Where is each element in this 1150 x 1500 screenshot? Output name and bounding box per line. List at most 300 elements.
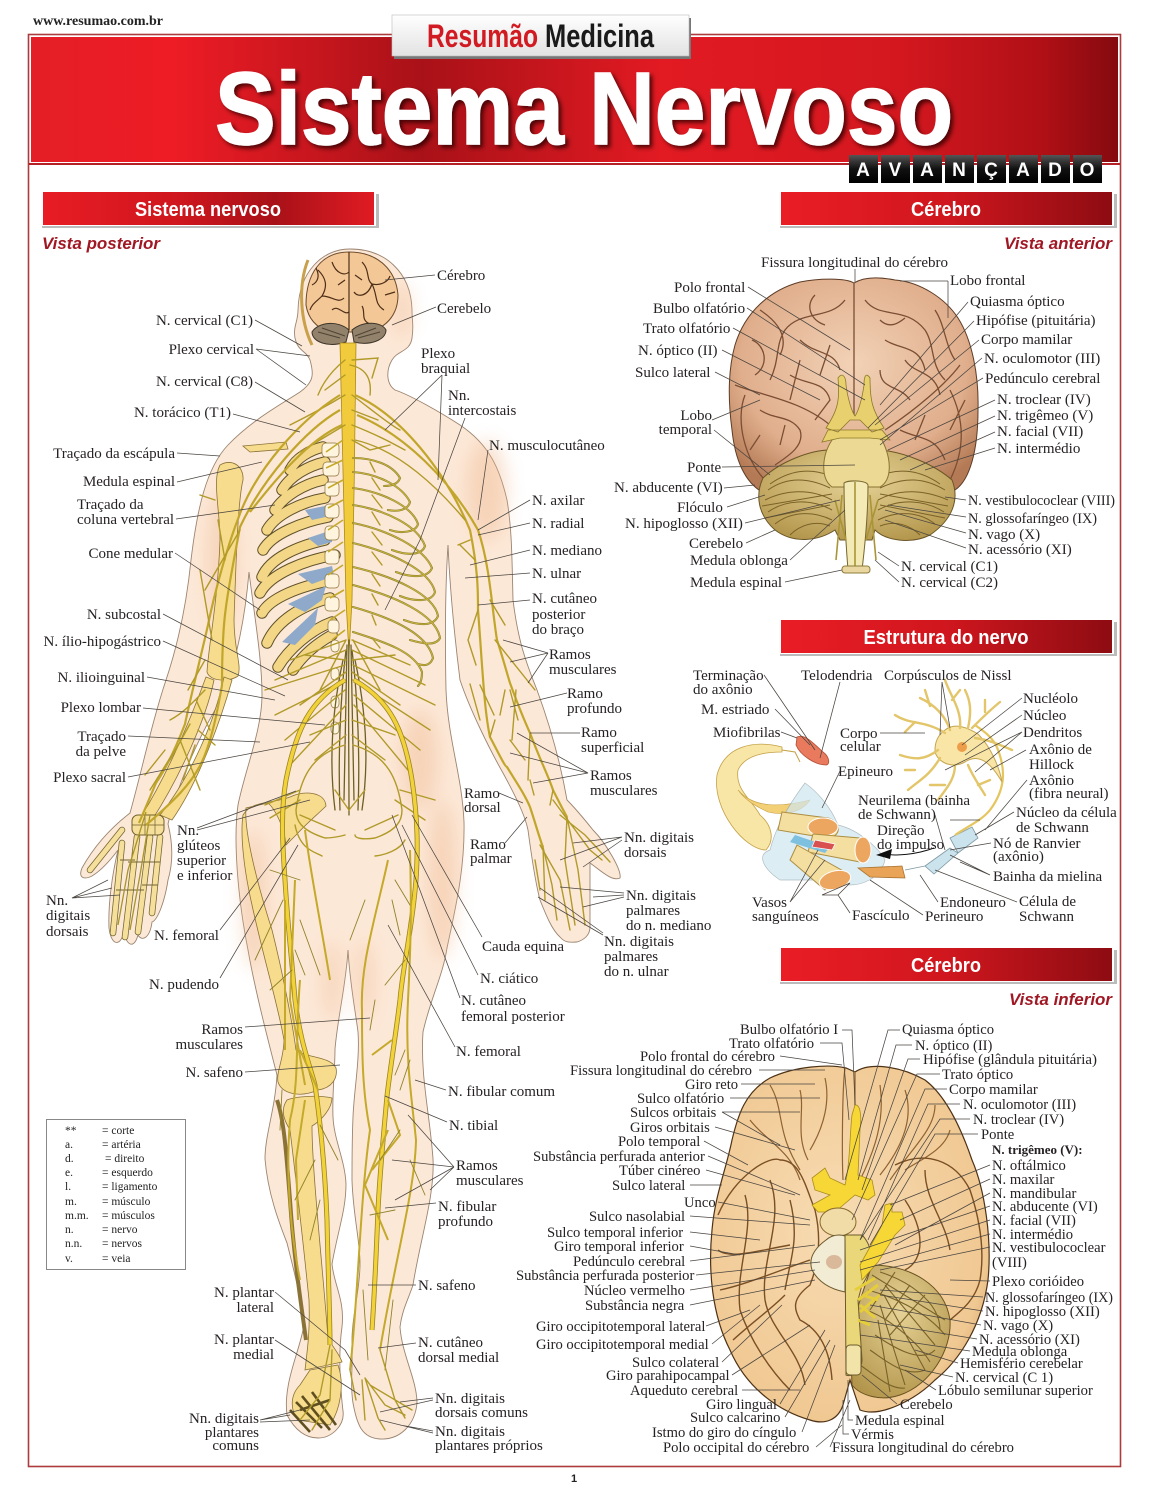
labels: Traçado bbox=[77, 729, 126, 745]
labels: dorsais bbox=[46, 924, 89, 940]
labels: de Schwann bbox=[1016, 820, 1089, 836]
pons and optic nerves bbox=[824, 432, 889, 487]
labels: N. vestibulococlear bbox=[992, 1240, 1106, 1256]
labels: superior bbox=[177, 853, 226, 869]
labels: palmares bbox=[626, 903, 680, 919]
dendrites bbox=[895, 680, 1012, 800]
labels: Sulco lateral bbox=[635, 365, 710, 381]
labels: N. troclear (IV) bbox=[973, 1112, 1064, 1128]
pelvis and femur bbox=[242, 793, 342, 1425]
labels: N. glossofaríngeo (IX) bbox=[985, 1290, 1113, 1306]
legend box: = corte bbox=[102, 1125, 134, 1137]
labels: Substância negra bbox=[585, 1298, 685, 1314]
labels: Nn. digitais bbox=[604, 934, 674, 950]
labels: N. troclear (IV) bbox=[997, 392, 1091, 408]
labels: Terminação bbox=[693, 668, 764, 684]
pons and medulla section bbox=[845, 1235, 871, 1376]
labels: Istmo do giro do cíngulo bbox=[652, 1425, 796, 1441]
labels: N. fibular bbox=[438, 1199, 496, 1215]
cerebellum bbox=[759, 450, 955, 540]
labels: N. abducente (VI) bbox=[992, 1199, 1098, 1215]
labels: Cauda equina bbox=[482, 939, 564, 955]
panel: body nervous system figure bbox=[44, 249, 711, 1454]
arm nerve left bbox=[139, 395, 342, 825]
labels: do n. mediano bbox=[626, 918, 711, 934]
labels: Ramos bbox=[201, 1022, 243, 1038]
section heading: cerebro inferior bbox=[779, 946, 1117, 984]
avancado badge bbox=[849, 155, 1102, 183]
labels: N. tibial bbox=[449, 1118, 498, 1134]
labels: Axônio de bbox=[1029, 742, 1092, 758]
left skeleton: scapula and humerus bbox=[142, 442, 288, 820]
legend box bbox=[46, 1120, 186, 1270]
labels: Corpo mamilar bbox=[981, 332, 1072, 348]
labels: Bulbo olfatório I bbox=[740, 1022, 838, 1038]
labels: Corpo mamilar bbox=[949, 1082, 1038, 1098]
legend box: e. bbox=[65, 1167, 73, 1179]
labels: Nn. bbox=[46, 893, 68, 909]
labels: Perineuro bbox=[925, 909, 983, 925]
labels: N. óptico (II) bbox=[638, 343, 718, 359]
outgoing nerve bundle bbox=[858, 866, 905, 878]
labels: Hillock bbox=[1029, 757, 1074, 773]
labels: Nn. bbox=[448, 388, 470, 404]
labels: intercostais bbox=[448, 403, 516, 419]
panel: nerve structure diagram bbox=[693, 668, 1117, 925]
labels: glúteos bbox=[177, 838, 220, 854]
legend box: = nervos bbox=[102, 1238, 143, 1250]
labels: profundo bbox=[567, 701, 622, 717]
myelinated axon bbox=[905, 827, 978, 874]
labels: Ramos bbox=[590, 768, 632, 784]
legend box: l. bbox=[65, 1181, 71, 1193]
labels: Nó de Ranvier bbox=[993, 836, 1080, 852]
labels: dorsais comuns bbox=[435, 1405, 528, 1421]
labels: N. mediano bbox=[532, 543, 602, 559]
labels bbox=[516, 1022, 1113, 1456]
labels: profundo bbox=[438, 1214, 493, 1230]
section heading: estrutura do nervo: Estrutura do nervo bbox=[864, 627, 1028, 649]
labels: N. plantar bbox=[214, 1285, 274, 1301]
labels: N. maxilar bbox=[992, 1172, 1055, 1188]
labels: Cerebelo bbox=[437, 301, 491, 317]
gyri bbox=[750, 1068, 950, 1180]
labels: N. hipoglosso (XII) bbox=[985, 1304, 1100, 1320]
labels: Célula de bbox=[1019, 894, 1076, 910]
labels: Trato olfatório bbox=[729, 1036, 814, 1052]
labels: Plexo sacral bbox=[53, 770, 126, 786]
labels: Cerebelo bbox=[689, 536, 743, 552]
labels: Lobo frontal bbox=[950, 273, 1025, 289]
cut brainstem bbox=[811, 1235, 845, 1292]
left spinal branches bbox=[326, 440, 345, 640]
labels: N. trigêmeo (V): bbox=[992, 1142, 1083, 1157]
labels: braquial bbox=[421, 361, 470, 377]
labels: do axônio bbox=[693, 682, 753, 698]
labels: N. intermédio bbox=[992, 1227, 1073, 1243]
labels: Plexo lombar bbox=[61, 700, 141, 716]
labels: Aqueduto cerebral bbox=[630, 1383, 738, 1399]
labels: do braço bbox=[532, 622, 584, 638]
labels: N. cervical (C 1) bbox=[955, 1370, 1053, 1386]
labels: N. cervical (C8) bbox=[156, 374, 253, 390]
labels: Substância perfurada anterior bbox=[533, 1149, 705, 1165]
labels: Quiasma óptico bbox=[970, 294, 1065, 310]
labels: Plexo cervical bbox=[169, 342, 254, 358]
labels: Medula espinal bbox=[855, 1413, 945, 1429]
legend box: ** bbox=[65, 1125, 77, 1137]
labels: Nn. digitais bbox=[626, 888, 696, 904]
left foot nerves bbox=[300, 1345, 332, 1430]
labels: Polo frontal bbox=[674, 280, 745, 296]
labels: Polo occipital do cérebro bbox=[663, 1440, 809, 1456]
labels: Nn. digitais bbox=[435, 1391, 505, 1407]
cervical and brachial branches bbox=[290, 358, 405, 452]
labels: N. plantar bbox=[214, 1332, 274, 1348]
legend box: = esquerdo bbox=[102, 1167, 153, 1179]
labels: Cone medular bbox=[88, 546, 173, 562]
legend box: = ligamento bbox=[102, 1181, 158, 1193]
avancado badge: N bbox=[952, 160, 966, 181]
labels: N. vestibulococlear (VIII) bbox=[968, 493, 1115, 509]
labels: Ramos bbox=[456, 1158, 498, 1174]
section heading: cerebro anterior bbox=[779, 190, 1117, 228]
labels: N. vago (X) bbox=[968, 527, 1040, 543]
labels: Schwann bbox=[1019, 909, 1074, 925]
labels: Sulco olfatório bbox=[637, 1091, 724, 1107]
labels: N. safeno bbox=[186, 1065, 243, 1081]
labels: N. cutâneo bbox=[532, 591, 597, 607]
section heading: estrutura do nervo bbox=[779, 618, 1117, 656]
cerebellum hemisphere bbox=[850, 1265, 950, 1398]
gyri bbox=[735, 283, 965, 480]
labels: N. acessório (XI) bbox=[968, 542, 1072, 558]
labels: Medula oblonga bbox=[690, 553, 788, 569]
avancado badge: A bbox=[1016, 160, 1030, 181]
subheading: vista inferior: Vista inferior bbox=[1009, 990, 1113, 1009]
cerebrum bbox=[729, 278, 978, 493]
labels: Traçado da bbox=[77, 497, 144, 513]
labels: posterior bbox=[532, 607, 585, 623]
leader lines bbox=[712, 269, 995, 582]
labels: Ramo bbox=[470, 837, 506, 853]
labels: N. facial (VII) bbox=[997, 424, 1083, 440]
labels: Ramos bbox=[549, 647, 591, 663]
labels: N. ilioinguinal bbox=[58, 670, 145, 686]
right foot nerves bbox=[350, 1350, 412, 1430]
labels: dorsais bbox=[624, 845, 667, 861]
labels: Medula oblonga bbox=[972, 1344, 1068, 1360]
cauda equina and lumbar branches bbox=[332, 640, 366, 815]
labels: Fissura longitudinal do cérebro bbox=[832, 1440, 1014, 1456]
skull and brain bbox=[302, 252, 398, 345]
labels: dorsal bbox=[464, 800, 501, 816]
legend box: = veia bbox=[102, 1253, 131, 1265]
labels: superficial bbox=[581, 740, 644, 756]
left ribs bbox=[260, 447, 335, 670]
labels: Pedúnculo cerebral bbox=[985, 371, 1100, 387]
labels: N. subcostal bbox=[87, 607, 161, 623]
labels: Axônio bbox=[1029, 773, 1074, 789]
labels: N. ulnar bbox=[532, 566, 581, 582]
legend box: v. bbox=[65, 1253, 73, 1265]
labels: Giro occipitotemporal lateral bbox=[536, 1319, 705, 1335]
labels: Medula espinal bbox=[83, 474, 175, 490]
labels: N. ciático bbox=[480, 971, 538, 987]
header banner bbox=[29, 37, 1120, 166]
labels: Cerebelo bbox=[900, 1397, 953, 1413]
labels: Unco bbox=[684, 1195, 716, 1211]
labels: N. cervical (C1) bbox=[901, 559, 998, 575]
brand tag: Resumão bbox=[427, 18, 538, 54]
labels: lateral bbox=[237, 1300, 274, 1316]
labels: plantares próprios bbox=[435, 1438, 543, 1454]
avancado badge: A bbox=[856, 160, 870, 181]
labels: plantares bbox=[205, 1425, 259, 1441]
spinal cord bbox=[340, 343, 356, 654]
labels: N. oculomotor (III) bbox=[984, 351, 1100, 367]
section heading: cerebro anterior: Cérebro bbox=[911, 199, 981, 221]
labels: Ramo bbox=[581, 725, 617, 741]
epineurium bbox=[763, 783, 885, 885]
labels: Hipófise (pituitária) bbox=[976, 313, 1096, 329]
trigeminal nerve bbox=[860, 1203, 905, 1280]
left foot bones bbox=[290, 1392, 336, 1432]
labels: Endoneuro bbox=[940, 895, 1006, 911]
avancado badge: V bbox=[889, 160, 902, 181]
left hand bones bbox=[90, 812, 164, 937]
title: Sistema Nervoso bbox=[215, 51, 953, 166]
labels: Nn. digitais bbox=[624, 830, 694, 846]
labels: Hemisfério cerebelar bbox=[960, 1356, 1083, 1372]
labels bbox=[693, 668, 1117, 925]
labels: N. femoral bbox=[456, 1044, 521, 1060]
labels: Sulco calcarino bbox=[690, 1410, 780, 1426]
labels: musculares bbox=[590, 783, 658, 799]
labels: N. glossofaríngeo (IX) bbox=[968, 511, 1097, 527]
labels: musculares bbox=[456, 1173, 524, 1189]
labels: Fissura longitudinal do cérebro bbox=[570, 1063, 752, 1079]
labels: N. cervical (C2) bbox=[901, 575, 998, 591]
labels: N. vago (X) bbox=[983, 1318, 1053, 1334]
subheading: vista posterior: Vista posterior bbox=[42, 234, 161, 253]
labels: Giro temporal inferior bbox=[554, 1239, 684, 1255]
labels: Bulbo olfatório bbox=[653, 301, 745, 317]
labels: Giro reto bbox=[685, 1077, 738, 1093]
labels: N. trigêmeo (V) bbox=[997, 408, 1093, 424]
labels: Polo temporal bbox=[618, 1134, 700, 1150]
labels: digitais bbox=[46, 908, 90, 924]
labels: Vasos bbox=[752, 895, 787, 911]
labels: Telodendria bbox=[801, 668, 873, 684]
labels: (axônio) bbox=[993, 849, 1044, 865]
labels: Cérebro bbox=[437, 268, 485, 284]
labels: Nn. digitais bbox=[435, 1424, 505, 1440]
labels: da pelve bbox=[76, 744, 126, 760]
mammillary and midbrain bbox=[820, 1208, 856, 1236]
labels: N. cutâneo bbox=[418, 1335, 483, 1351]
labels: N. acessório (XI) bbox=[979, 1332, 1080, 1348]
labels: M. estriado bbox=[701, 702, 769, 718]
legend box: = direito bbox=[105, 1153, 145, 1165]
vertebrae bbox=[322, 443, 339, 734]
cerebrum base bbox=[711, 1066, 989, 1422]
legend box: = nervo bbox=[102, 1224, 138, 1236]
medulla and spinal cord bbox=[844, 481, 868, 570]
labels: medial bbox=[233, 1347, 274, 1363]
labels: do impulso bbox=[877, 837, 944, 853]
skin shading bbox=[208, 282, 507, 1020]
labels: temporal bbox=[659, 422, 712, 438]
labels: femoral posterior bbox=[461, 1009, 565, 1025]
labels: Bainha da mielina bbox=[993, 869, 1102, 885]
labels: N. intermédio bbox=[997, 441, 1080, 457]
labels: Pedúnculo cerebral bbox=[573, 1254, 685, 1270]
labels: Trato olfatório bbox=[643, 321, 730, 337]
labels: Neurilema (bainha bbox=[858, 793, 970, 809]
labels: (VIII) bbox=[992, 1255, 1027, 1271]
subheading: vista anterior: Vista anterior bbox=[1004, 234, 1113, 253]
labels: Ramo bbox=[567, 686, 603, 702]
avancado badge: A bbox=[920, 160, 934, 181]
labels: e inferior bbox=[177, 868, 232, 884]
labels: sanguíneos bbox=[752, 909, 819, 925]
labels: comuns bbox=[212, 1438, 259, 1454]
labels: Nn. bbox=[177, 823, 199, 839]
labels: Giro occipitotemporal medial bbox=[536, 1337, 709, 1353]
website url: www.resumao.com.br bbox=[33, 14, 163, 29]
labels: musculares bbox=[549, 662, 617, 678]
labels: Quiasma óptico bbox=[902, 1022, 994, 1038]
labels: N. mandibular bbox=[992, 1186, 1076, 1202]
intercostal nerves right bbox=[353, 458, 440, 686]
leader lines bbox=[764, 675, 1027, 915]
labels: palmar bbox=[470, 851, 512, 867]
labels: Giros orbitais bbox=[630, 1120, 710, 1136]
labels: N. cutâneo bbox=[461, 993, 526, 1009]
legend box: = músculo bbox=[102, 1196, 151, 1208]
labels: Sulco temporal inferior bbox=[547, 1225, 683, 1241]
secondary leg nerves bbox=[285, 830, 416, 1370]
fascicles bbox=[778, 812, 838, 838]
labels: N. oculomotor (III) bbox=[963, 1097, 1076, 1113]
avancado badge: Ç bbox=[984, 160, 998, 181]
body silhouette bbox=[81, 249, 620, 1439]
labels: musculares bbox=[176, 1037, 243, 1053]
panel: brain anterior view bbox=[614, 255, 1115, 591]
labels: N. fibular comum bbox=[448, 1084, 555, 1100]
arm nerve right bbox=[355, 395, 567, 847]
labels: Fascículo bbox=[852, 908, 910, 924]
legend box: n.n. bbox=[65, 1238, 82, 1250]
labels: do n. ulnar bbox=[604, 964, 669, 980]
labels: N. ílio-hipogástrico bbox=[44, 634, 161, 650]
labels: (fibra neural) bbox=[1029, 786, 1109, 802]
section heading: sistema nervoso bbox=[41, 190, 379, 228]
legend box: = artéria bbox=[102, 1139, 141, 1151]
legend box: d. bbox=[65, 1153, 74, 1165]
legend box: = músculos bbox=[102, 1210, 155, 1222]
labels: N. oftálmico bbox=[992, 1158, 1066, 1174]
labels: Plexo corióideo bbox=[992, 1274, 1084, 1290]
labels: Nn. digitais bbox=[189, 1411, 259, 1427]
labels: Corpúsculos de Nissl bbox=[884, 668, 1012, 684]
labels: Ramo bbox=[464, 786, 500, 802]
cranial nerve roots bbox=[855, 1278, 880, 1325]
impulse arrow bbox=[886, 848, 934, 855]
lung shading bbox=[282, 505, 334, 645]
labels: coluna vertebral bbox=[77, 512, 174, 528]
brand tag bbox=[392, 15, 691, 59]
labels: N. cervical (C1) bbox=[156, 313, 253, 329]
labels: Dendritos bbox=[1023, 725, 1082, 741]
labels: dorsal medial bbox=[418, 1350, 499, 1366]
main leg nerves bbox=[282, 680, 417, 1345]
labels: Ponte bbox=[981, 1127, 1014, 1143]
labels: Vérmis bbox=[851, 1427, 894, 1443]
labels: N. axilar bbox=[532, 493, 584, 509]
labels: Trato óptico bbox=[942, 1067, 1013, 1083]
neuron body bbox=[935, 726, 1002, 782]
labels: N. facial (VII) bbox=[992, 1213, 1076, 1229]
labels: Polo frontal do cérebro bbox=[640, 1049, 775, 1065]
labels bbox=[44, 268, 711, 1454]
labels: Hipófise (glândula pituitária) bbox=[923, 1052, 1097, 1068]
labels: Direção bbox=[877, 823, 924, 839]
labels: N. safeno bbox=[418, 1278, 475, 1294]
brand tag: Medicina bbox=[545, 18, 654, 54]
nerve sheath swoosh bbox=[716, 744, 782, 850]
labels: Epineuro bbox=[838, 764, 893, 780]
legend box: a. bbox=[65, 1139, 73, 1151]
labels: N. hipoglosso (XII) bbox=[625, 516, 743, 532]
labels: N. abducente (VI) bbox=[614, 480, 723, 496]
labels: Plexo bbox=[421, 346, 455, 362]
labels: N. musculocutâneo bbox=[489, 438, 605, 454]
legend box: m. bbox=[65, 1196, 77, 1208]
labels: N. torácico (T1) bbox=[134, 405, 231, 421]
labels: Nucléolo bbox=[1023, 691, 1078, 707]
labels: Corpo bbox=[840, 726, 878, 742]
legend box: n. bbox=[65, 1224, 74, 1236]
labels: Giro lingual bbox=[706, 1397, 777, 1413]
labels: Sulco colateral bbox=[632, 1355, 719, 1371]
labels: Substância perfurada posterior bbox=[516, 1268, 694, 1284]
labels: Fissura longitudinal do cérebro bbox=[761, 255, 948, 271]
labels: Giro parahipocampal bbox=[606, 1368, 730, 1384]
labels: Sulco lateral bbox=[612, 1178, 685, 1194]
hand right nerves bbox=[535, 800, 610, 930]
labels: Sulcos orbitais bbox=[630, 1105, 717, 1121]
leader lines bbox=[690, 1030, 990, 1447]
leader lines bbox=[72, 275, 624, 1433]
labels: Sulco nasolabial bbox=[589, 1209, 685, 1225]
labels: palmares bbox=[604, 949, 658, 965]
labels: Ponte bbox=[687, 460, 722, 476]
labels: Miofibrilas bbox=[713, 725, 781, 741]
labels: Lobo bbox=[680, 408, 712, 424]
avancado badge: D bbox=[1048, 160, 1062, 181]
panel: brain inferior view bbox=[516, 1022, 1113, 1456]
labels bbox=[614, 255, 1115, 591]
labels: Medula espinal bbox=[690, 575, 782, 591]
section heading: cerebro inferior: Cérebro bbox=[911, 955, 981, 977]
labels: Núcleo vermelho bbox=[584, 1283, 685, 1299]
optic chiasm and tract bbox=[812, 1105, 875, 1212]
labels: Lóbulo semilunar superior bbox=[938, 1383, 1093, 1399]
legend box: m.m. bbox=[65, 1210, 89, 1222]
labels: de Schwann) bbox=[858, 807, 936, 823]
